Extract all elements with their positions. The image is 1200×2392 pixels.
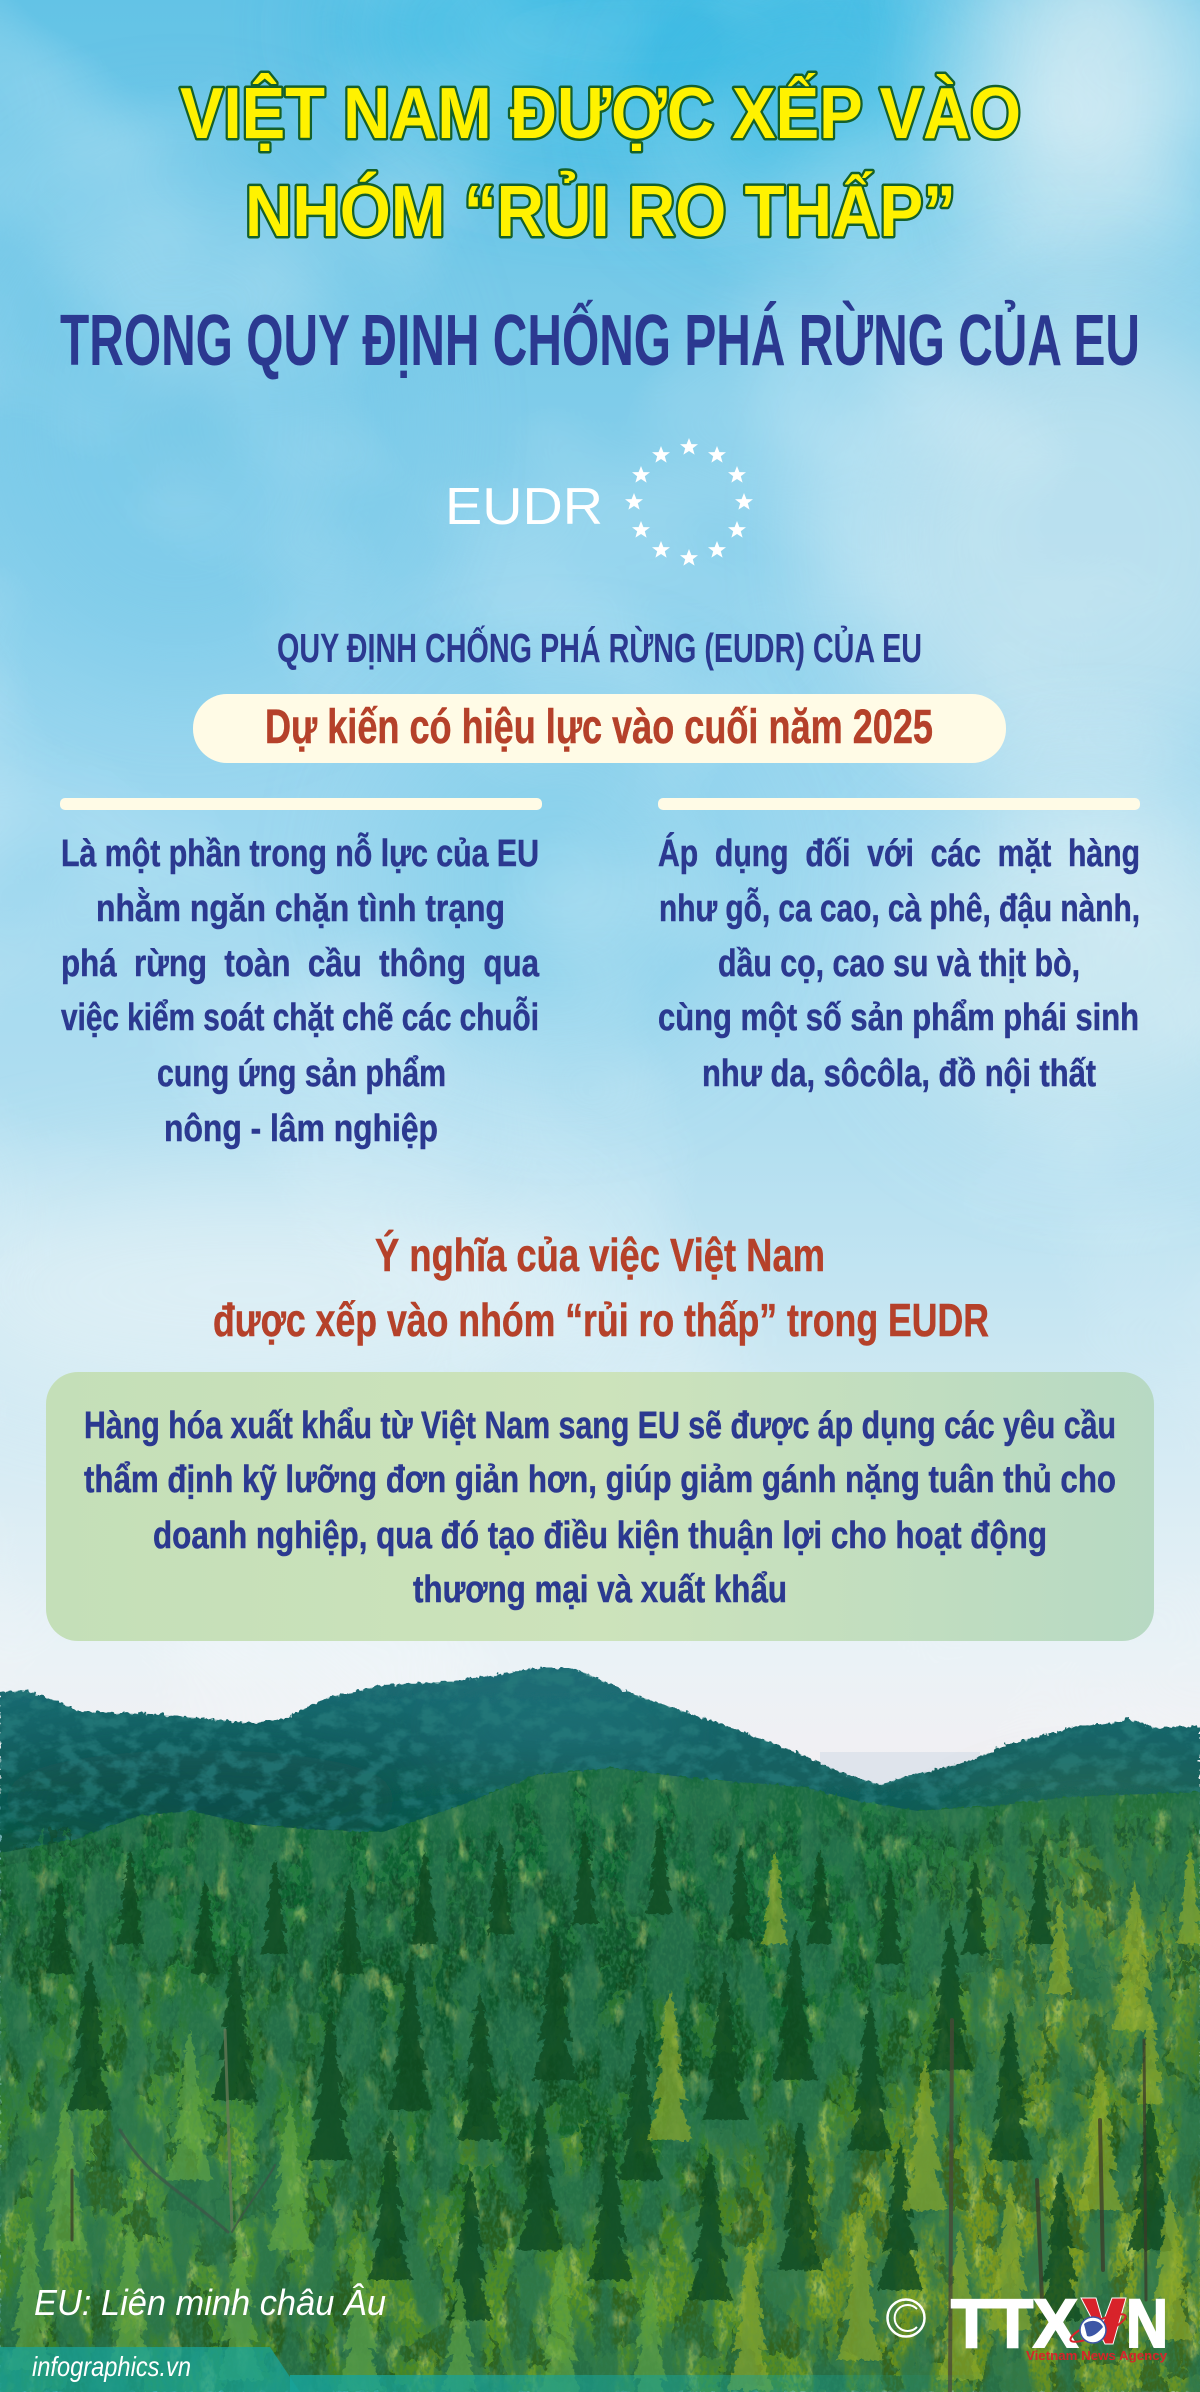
heading: significance [213, 1229, 989, 1346]
column: EU effort: Là một phần trong nỗ lực của EU [61, 831, 539, 875]
logo: EUDR with ring of EU stars: EUDR [445, 478, 603, 536]
column: EU effort: nông - lâm nghiệp [164, 1108, 438, 1150]
regulation label: QUY ĐỊNH CHỐNG PHÁ RỪNG (EUDR) CỦA EU [277, 625, 922, 671]
column: EU effort: việc kiểm soát chặt chẽ các chuỗi [61, 995, 539, 1039]
logo: TTXVN: TTX [951, 2285, 1078, 2362]
logo: TTXVN: N [1126, 2285, 1168, 2362]
column: covered goods: dầu cọ, cao su và thịt bò, [718, 943, 1080, 985]
heading: significance: được xếp vào nhóm “rủi ro thấp” trong EUDR [213, 1294, 989, 1346]
footnote: EU definition: EU: Liên minh châu Âu [34, 2282, 386, 2323]
sky background [0, 0, 1200, 1800]
column: EU effort [60, 798, 542, 1150]
icon: copyright [888, 2300, 924, 2336]
tree trunks and branches [72, 2020, 1146, 2392]
title: yellow heading: VIỆT NAM ĐƯỢC XẾP VÀO [180, 73, 1021, 154]
logo: TTXVN [951, 2285, 1168, 2363]
tree canopy texture [0, 1790, 1200, 2392]
panel: benefits [46, 1372, 1154, 1641]
distinct conifers [7, 1820, 1200, 2392]
column: covered goods: như da, sôcôla, đồ nội thất [702, 1053, 1096, 1095]
footer band with source: infographics.vn [32, 2351, 191, 2382]
pill: effective date: Dự kiến có hiệu lực vào cuối năm 2025 [265, 701, 933, 754]
heading: significance: Ý nghĩa của việc Việt Nam [375, 1229, 825, 1281]
logo: EUDR with ring of EU stars [445, 438, 753, 566]
column: EU effort: phá rừng toàn cầu thông qua [61, 943, 540, 985]
title: yellow heading: NHÓM “RỦI RO THẤP” [245, 171, 956, 252]
panel: benefits: thương mại và xuất khẩu [413, 1569, 787, 1611]
column: EU effort: cung ứng sản phẩm [157, 1053, 446, 1095]
column: covered goods [658, 798, 1140, 1095]
logo: TTXVN: Vietnam News Agency [1026, 2348, 1168, 2363]
footer band with source [0, 2347, 1000, 2392]
forest photo illustration [0, 1668, 1200, 2392]
pill: effective date [193, 694, 1006, 763]
column: EU effort: nhằm ngăn chặn tình trạng [96, 886, 505, 930]
title: yellow heading [180, 73, 1021, 252]
